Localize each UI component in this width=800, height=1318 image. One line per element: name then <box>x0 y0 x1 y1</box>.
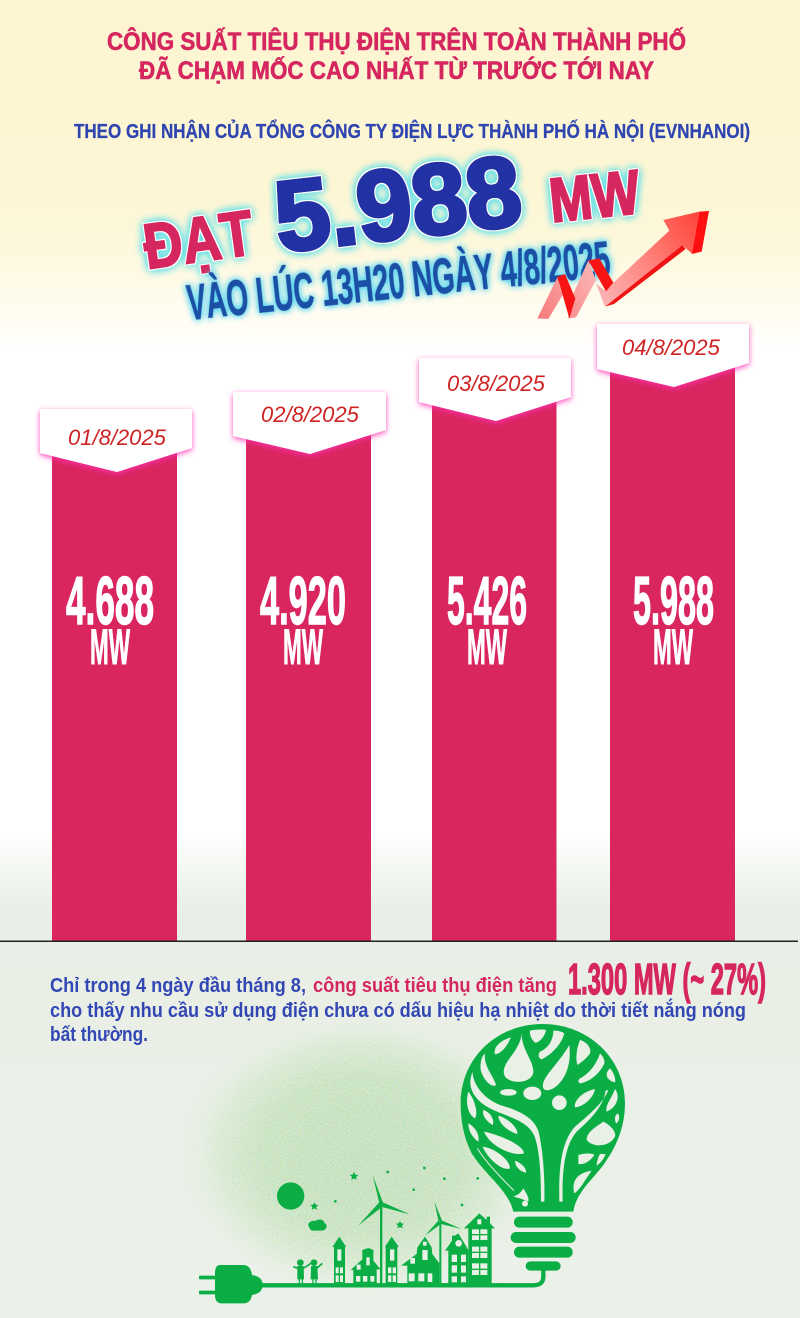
bar: 02/8/2025: 02/8/2025 <box>261 402 360 427</box>
bar: 03/8/2025: MW <box>467 619 507 675</box>
summary text: công suất tiêu thụ điện tăng <box>313 975 557 997</box>
arrow: rising red trend <box>537 211 709 319</box>
bar: 03/8/2025: 03/8/2025 <box>447 371 546 396</box>
summary text: cho thấy nhu cầu sử dụng điện chưa có dấu hiệu hạ nhiệt do thời tiết nắng nóng <box>50 998 746 1022</box>
bar: 03/8/2025: 5.426 <box>447 563 527 639</box>
value: 5.988: 5.988 <box>269 135 527 274</box>
title <box>107 26 686 85</box>
icon: light bulb <box>461 1024 625 1212</box>
unit: MW: MW <box>546 158 643 236</box>
bar: 04/8/2025: MW <box>653 619 693 675</box>
bar: 01/8/2025: 01/8/2025 <box>68 425 167 450</box>
bar: 04/8/2025: 04/8/2025 <box>622 335 721 360</box>
bar: 02/8/2025 <box>233 392 386 941</box>
summary text: Chỉ trong 4 ngày đầu tháng 8, <box>50 975 306 997</box>
summary text: bất thường. <box>50 1024 148 1046</box>
bar: 01/8/2025: 4.688 <box>66 563 154 639</box>
bar: 01/8/2025 <box>40 409 192 941</box>
icon: children <box>293 1259 322 1284</box>
title: ĐÃ CHẠM MỐC CAO NHẤT TỪ TRƯỚC TỚI NAY <box>139 55 654 85</box>
bar chart <box>40 324 749 941</box>
icon: bulb base, cord and plug <box>199 1167 576 1303</box>
title: CÔNG SUẤT TIÊU THỤ ĐIỆN TRÊN TOÀN THÀNH PHỐ <box>107 26 686 56</box>
illustration: green city and light bulb <box>199 1024 625 1303</box>
bar: 03/8/2025 <box>419 358 571 941</box>
icon: cloud <box>308 1220 327 1231</box>
bar: 02/8/2025: MW <box>283 619 323 675</box>
bar: 04/8/2025 <box>597 324 749 941</box>
bar: 01/8/2025: MW <box>90 619 130 675</box>
icon: wind turbines and houses <box>320 1175 510 1287</box>
summary text <box>50 955 766 1046</box>
green haze behind illustration <box>184 1017 540 1293</box>
icon: sun <box>277 1182 304 1210</box>
stars <box>310 1167 479 1228</box>
headline: reached value <box>139 135 643 283</box>
bar: 04/8/2025: 5.988 <box>633 563 714 639</box>
word: ĐẠT: ĐẠT <box>139 196 258 283</box>
bar: 02/8/2025: 4.920 <box>260 563 346 639</box>
